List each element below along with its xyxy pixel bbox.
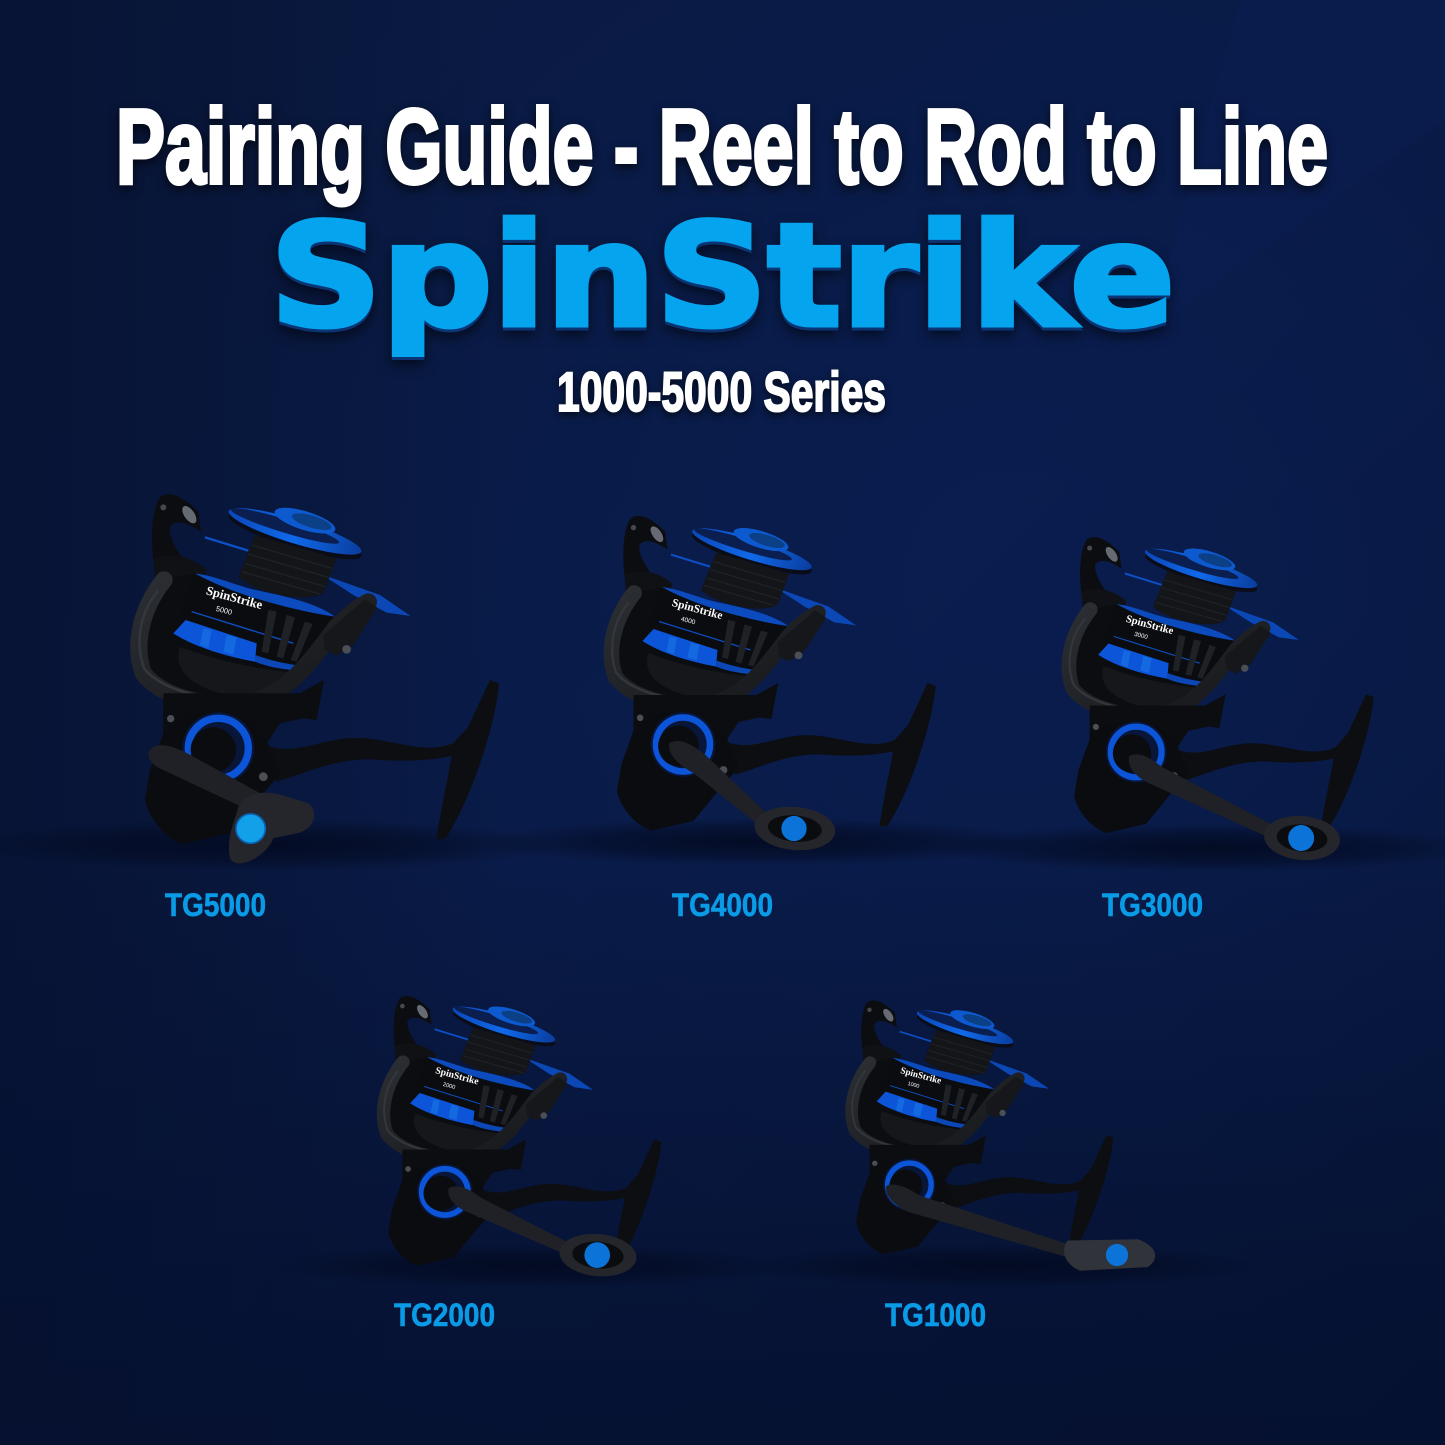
logo: SpinStrike: SpinStrike (270, 194, 1175, 359)
reel 5000 handle (148, 745, 314, 863)
reel 4000 brand text (668, 597, 724, 633)
reel 5000 brand text (201, 584, 264, 624)
reel: TG3000 (1069, 537, 1374, 863)
reel 3000 brand text: 3000 (1133, 631, 1149, 641)
reel: TG1000 (852, 1000, 1155, 1271)
reel 2000 handle (448, 1186, 638, 1279)
reel: TG5000 (139, 494, 499, 863)
reel 3000 brand text: SpinStrike (1125, 613, 1175, 637)
subtitle: 1000-5000 Series (557, 360, 886, 423)
reel 2000 brand text: 2000 (442, 1082, 456, 1091)
reel 1000 handle (886, 1184, 1155, 1271)
reel 1000 brand text: 1000 (907, 1081, 920, 1090)
reel 2000 brand text (432, 1065, 481, 1097)
reel 5000 brand text: 5000 (215, 604, 233, 617)
label: TG2000: TG2000 (394, 1297, 495, 1333)
reel: TG4000 (611, 516, 936, 854)
label: TG4000: TG4000 (672, 887, 773, 923)
reel 4000 brand text: 4000 (680, 616, 696, 626)
reel 1000 brand text: SpinStrike (900, 1065, 943, 1086)
label: TG5000: TG5000 (165, 887, 266, 923)
reel 4000 brand text: SpinStrike (671, 597, 724, 622)
reel 4000 handle (669, 741, 837, 854)
label: TG3000: TG3000 (1102, 887, 1203, 923)
label: TG1000: TG1000 (885, 1297, 986, 1333)
reel 3000 brand text (1122, 613, 1175, 647)
reel 2000 brand text: SpinStrike (434, 1065, 481, 1088)
reel 1000 brand text (897, 1065, 943, 1095)
reel 5000 brand text: SpinStrike (205, 584, 264, 612)
reel: TG2000 (384, 996, 661, 1279)
reel 3000 handle (1129, 754, 1342, 863)
